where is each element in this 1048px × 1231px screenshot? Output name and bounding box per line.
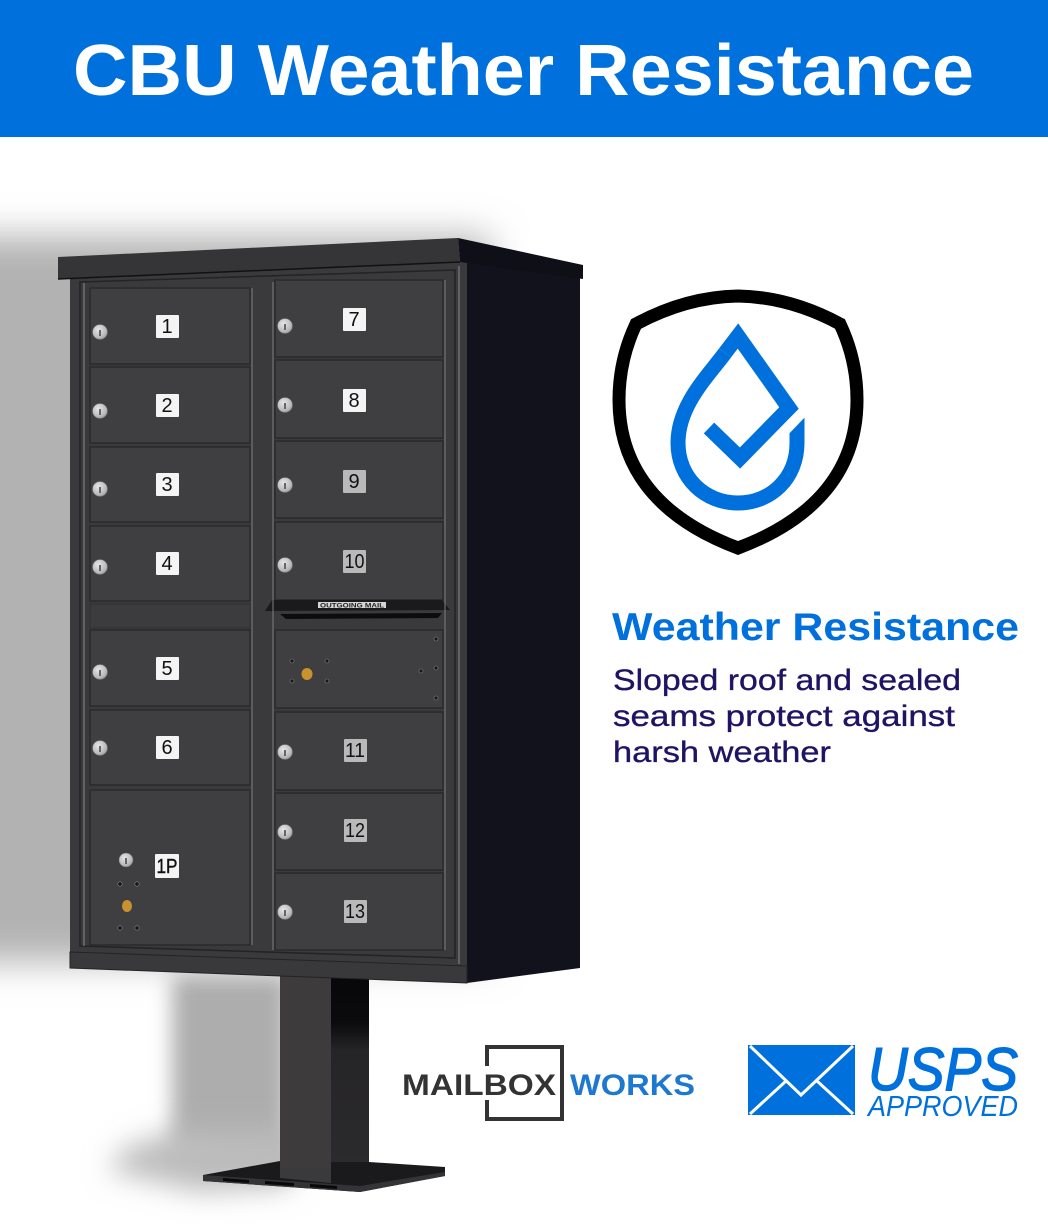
description text: Sloped roof and sealed	[613, 664, 961, 697]
outgoing mail slot: OUTGOING MAIL	[320, 604, 384, 610]
door 13	[275, 873, 443, 950]
door 10: 10	[344, 551, 364, 573]
door 6	[90, 710, 250, 785]
door 11	[275, 712, 443, 790]
door 7	[275, 280, 443, 357]
master lock panel	[275, 630, 443, 708]
door 11: 11	[345, 740, 365, 762]
door 9: 9	[348, 471, 360, 493]
logo: usps approved: APPROVED	[866, 1091, 1018, 1123]
door 6: 6	[161, 737, 173, 759]
door 10	[275, 522, 443, 600]
door 5: 5	[161, 658, 173, 680]
door 5	[90, 630, 250, 706]
door 8: 8	[348, 390, 360, 412]
pedestal base plate	[203, 1161, 445, 1192]
cabinet front	[70, 262, 467, 983]
door 1: 1	[161, 316, 173, 338]
logo: usps approved	[748, 1036, 1018, 1123]
door 3: 3	[161, 474, 173, 496]
door 1	[90, 288, 250, 364]
door 7: 7	[348, 309, 360, 331]
description text: harsh weather	[613, 736, 831, 769]
door 4	[90, 526, 250, 601]
parcel door 1P	[90, 790, 250, 945]
description text: seams protect against	[613, 700, 956, 733]
door 3	[90, 447, 250, 522]
wall shadow	[0, 236, 490, 1192]
outgoing mail slot	[265, 600, 450, 619]
icon: shield with water drop	[619, 296, 857, 548]
parcel door 1P: 1P	[156, 856, 178, 878]
description text	[613, 664, 961, 769]
title banner	[0, 0, 1048, 137]
door 9	[275, 441, 443, 518]
door 12: 12	[345, 820, 365, 842]
cabinet roof	[58, 238, 583, 279]
title banner: CBU Weather Resistance	[73, 31, 974, 111]
door 2: 2	[161, 395, 173, 417]
door 12	[275, 793, 443, 870]
door 8	[275, 360, 443, 438]
door 4: 4	[161, 553, 173, 575]
logo: mailbox works: MAILBOX	[402, 1069, 556, 1102]
logo: mailbox works	[402, 1047, 695, 1119]
door 13: 13	[345, 901, 365, 923]
heading: weather resistance: Weather Resistance	[612, 606, 1019, 649]
door 2	[90, 367, 250, 443]
logo: usps approved: USPS	[868, 1036, 1018, 1103]
door edge highlights	[252, 280, 445, 950]
logo: mailbox works: WORKS	[570, 1069, 695, 1102]
pedestal post	[280, 975, 369, 1170]
cabinet side	[458, 262, 580, 983]
